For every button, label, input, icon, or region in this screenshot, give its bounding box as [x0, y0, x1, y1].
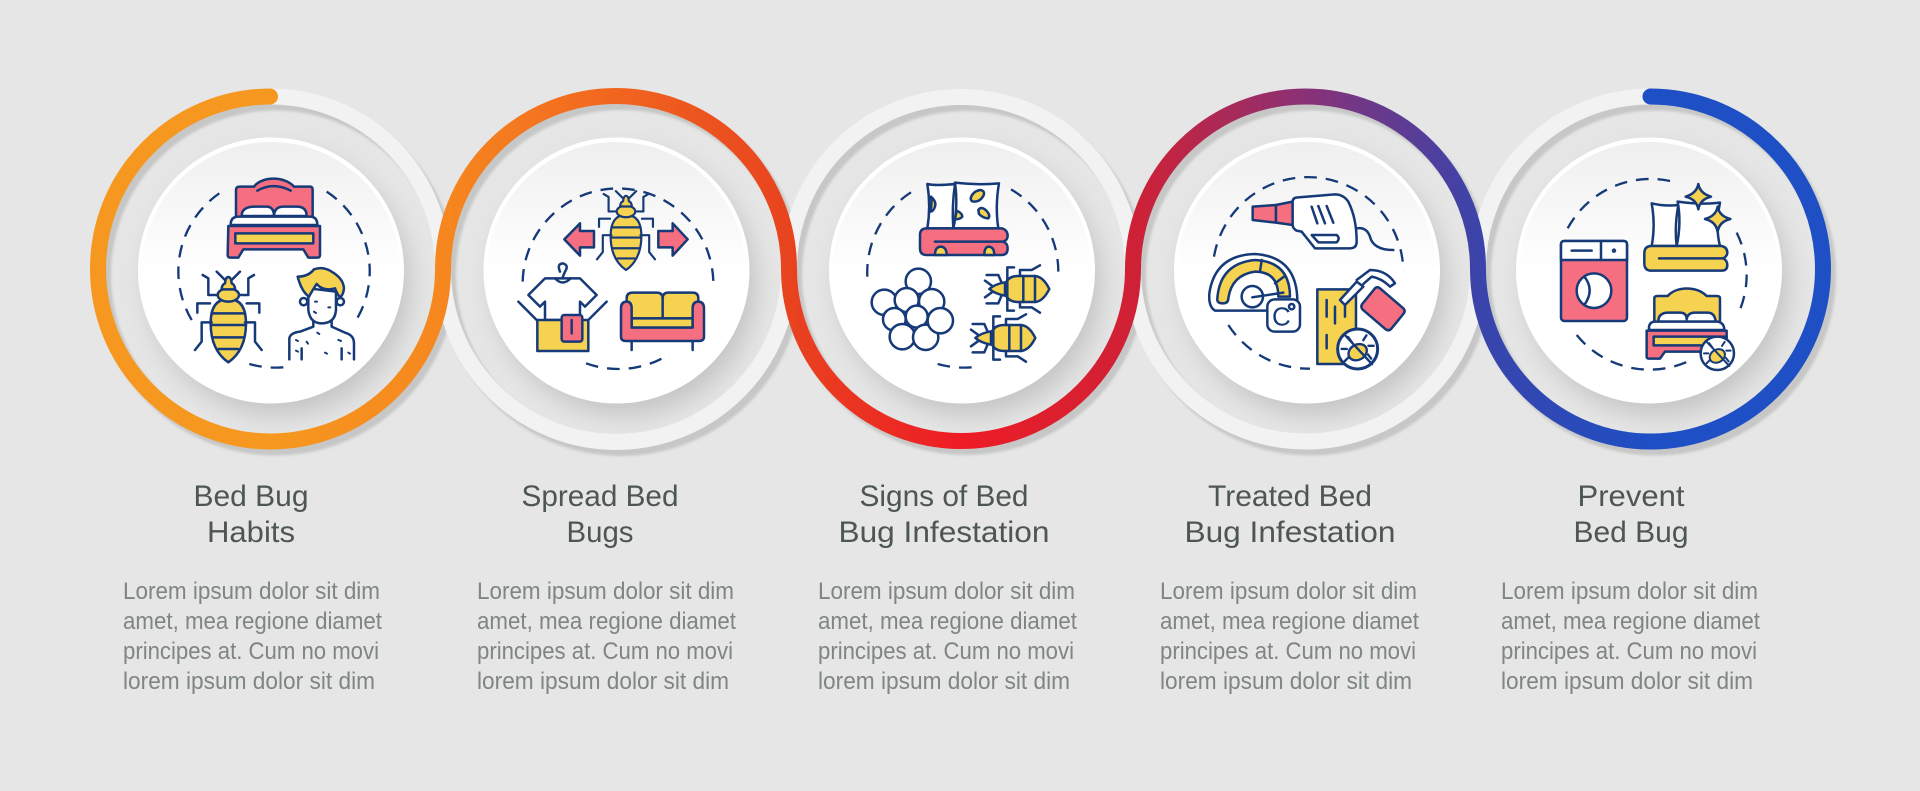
disc: [1516, 138, 1782, 404]
body text: Lorem ipsum dolor sit dim: [123, 578, 380, 605]
body text: amet, mea regione diamet: [477, 608, 736, 635]
heading: Treated Bed: [1208, 480, 1372, 513]
icon: heat gun, temperature gauge and spray: [1209, 177, 1405, 369]
body text: Lorem ipsum dolor sit dim: [477, 578, 734, 605]
panel: prevent bed bug: [1501, 138, 1782, 695]
body text: Lorem ipsum dolor sit dim: [1501, 578, 1758, 605]
icon: bed, bug and person with bites: [178, 179, 370, 368]
body text: lorem ipsum dolor sit dim: [818, 668, 1070, 695]
body text: amet, mea regione diamet: [818, 608, 1077, 635]
disc: [829, 138, 1095, 404]
body text: principes at. Cum no movi: [1160, 638, 1416, 665]
body text: lorem ipsum dolor sit dim: [123, 668, 375, 695]
icon: stained bedding, eggs and bugs: [867, 183, 1058, 368]
inactive ribbon segments: [270, 96, 1650, 442]
heading: Habits: [207, 516, 295, 549]
panel: signs of bed bug infestation: [818, 138, 1095, 695]
body text: principes at. Cum no movi: [477, 638, 733, 665]
body text: amet, mea regione diamet: [1501, 608, 1760, 635]
body text: lorem ipsum dolor sit dim: [1501, 668, 1753, 695]
icon: heat gun, temperature gauge and spray: C: [1272, 302, 1291, 332]
panel: spread bed bugs: [477, 138, 750, 695]
icon: washer, clean bedding and protected bed: [1561, 179, 1747, 370]
heading: Bed Bug: [1574, 516, 1688, 549]
heading: Bug Infestation: [1184, 516, 1396, 549]
panel: bed bug habits: [123, 138, 404, 695]
panel: treated bed bug infestation: [1160, 138, 1440, 695]
disc: [484, 138, 750, 404]
heading: Bugs: [566, 516, 634, 549]
heading: Spread Bed: [522, 480, 678, 513]
body text: amet, mea regione diamet: [1160, 608, 1419, 635]
heading: Bug Infestation: [838, 516, 1050, 549]
icon: spreading bug, clothes box and sofa: [518, 188, 713, 369]
body text: amet, mea regione diamet: [123, 608, 382, 635]
ribbon shadow: [103, 102, 1828, 448]
body text: principes at. Cum no movi: [123, 638, 379, 665]
body text: lorem ipsum dolor sit dim: [477, 668, 729, 695]
disc shadows: [148, 153, 1788, 415]
disc: [1174, 138, 1440, 404]
body text: Lorem ipsum dolor sit dim: [818, 578, 1075, 605]
body text: principes at. Cum no movi: [818, 638, 1074, 665]
active gradient ribbon: [98, 96, 1823, 442]
body text: lorem ipsum dolor sit dim: [1160, 668, 1412, 695]
heading: Prevent: [1578, 480, 1685, 513]
body text: Lorem ipsum dolor sit dim: [1160, 578, 1417, 605]
body text: principes at. Cum no movi: [1501, 638, 1757, 665]
looping progress ribbon: [98, 96, 1828, 448]
disc: [138, 138, 404, 404]
heading: Bed Bug: [194, 480, 308, 513]
heading: Signs of Bed: [860, 480, 1028, 513]
